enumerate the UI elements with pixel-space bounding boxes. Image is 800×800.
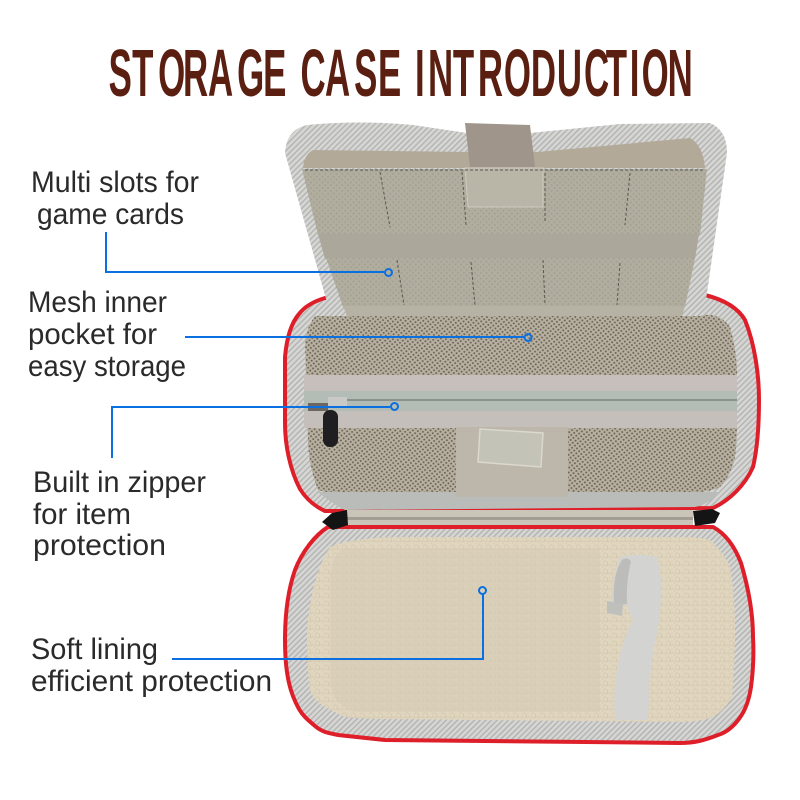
shaded lining centre: [330, 548, 600, 712]
upper slots: [302, 169, 707, 235]
zipper tape upper: [304, 375, 737, 391]
shadow at zip end: [308, 403, 328, 411]
soft honeycomb lining: [307, 537, 735, 722]
beige hinge strip: [347, 510, 693, 525]
zipper pull: [323, 410, 338, 447]
label text: game cards: [37, 198, 184, 231]
lower folded rim: [318, 492, 720, 510]
metal slider: [328, 397, 347, 407]
leader line: [185, 336, 524, 338]
leader line: [112, 407, 390, 458]
label text: Multi slots for: [31, 166, 199, 199]
label text: pocket for: [28, 318, 157, 351]
callout: soft lining: [31, 587, 486, 698]
callout: multi slots for game cards: [31, 166, 392, 276]
marker: [391, 403, 398, 410]
label text: Built in zipper: [33, 466, 206, 499]
marker: [385, 269, 392, 276]
strap stitched tag: [607, 601, 623, 616]
zipper centre line: [335, 399, 737, 401]
marker: [479, 587, 486, 594]
bottom seam: [343, 306, 685, 316]
zipper teeth: [304, 391, 737, 411]
marker: [524, 334, 532, 341]
label text: easy storage: [28, 350, 186, 383]
label text: Soft lining: [31, 633, 158, 666]
label text: protection: [33, 529, 166, 562]
strap inner loop shadow: [614, 558, 631, 605]
lid top fabric: [303, 138, 705, 168]
black corner left: [322, 510, 348, 530]
pull tab: [465, 123, 535, 167]
title: STORAGE CASE INTRODUCTION: [109, 37, 693, 111]
elastic strap: [612, 555, 661, 720]
mesh pocket: [305, 315, 737, 493]
velcro patch: [478, 429, 543, 467]
lid woven border: [285, 122, 727, 316]
open lid: [285, 122, 727, 316]
centre tab: [456, 427, 568, 497]
callout: mesh inner pocket: [28, 286, 532, 383]
middle band: [318, 234, 699, 259]
label text: Mesh inner: [28, 286, 167, 319]
leader line: [106, 232, 384, 272]
shell with red zipper edge and grey woven border: [285, 295, 759, 511]
lower slots: [326, 258, 695, 307]
black corner right: [693, 509, 720, 526]
zipper tape lower: [304, 411, 737, 428]
hinge shadow: [347, 517, 693, 520]
label text: for item: [33, 498, 131, 531]
velcro strip: [465, 168, 543, 207]
callout: built in zipper: [33, 403, 398, 562]
leader line: [172, 594, 483, 659]
hinge: [322, 509, 720, 530]
shell with red zipper edge and grey woven border: [285, 527, 753, 743]
label text: efficient protection: [31, 665, 272, 698]
lower case shell: [285, 527, 753, 743]
storage case photo illustration: [285, 122, 759, 743]
middle compartment: [285, 295, 759, 511]
slot stitching: [305, 170, 704, 305]
